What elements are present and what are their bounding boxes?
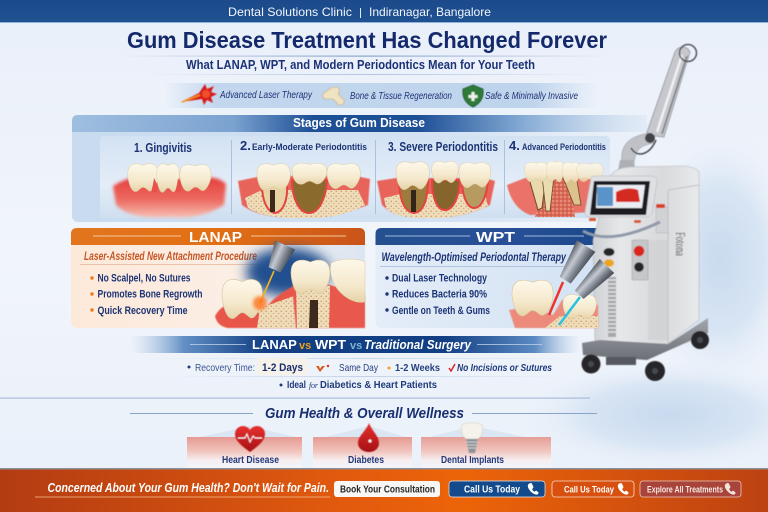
label: regeneration: Bone & Tissue Regeneration xyxy=(350,90,452,102)
machine brand: Fotona xyxy=(672,232,687,256)
button: explore treatments xyxy=(640,481,741,497)
WPT bullets: Dual Laser Technology xyxy=(392,272,488,284)
icon: laser burst xyxy=(181,84,217,105)
top clinic bar: Indiranagar, Bangalore xyxy=(369,5,491,19)
stage 2: early-moderate periodontitis: Early-Moderate Periodontitis xyxy=(252,142,367,153)
comparison row: ideal for: Diabetics & Heart Patients xyxy=(320,379,437,391)
stages heading band xyxy=(72,115,647,132)
stages heading band: Stages of Gum Disease xyxy=(293,116,425,130)
comparison row: recovery: Recovery Time: xyxy=(195,362,255,374)
footer message: Concerned About Your Gum Health? Don't Wait for Pain. xyxy=(48,481,329,495)
benefit strip xyxy=(165,83,597,108)
LANAP bullets xyxy=(90,272,203,317)
LANAP subtitle: Laser-Assisted New Attachment Procedure xyxy=(84,251,257,263)
WPT laser illustration xyxy=(509,240,614,328)
comparison heading band: Traditional Surgery xyxy=(364,337,472,352)
card: heart disease xyxy=(187,426,302,468)
WPT bullets: Gentle on Teeth & Gums xyxy=(392,305,490,317)
subtitle: What LANAP, WPT, and Modern Periodontics Mean for Your Teeth xyxy=(186,58,535,72)
LANAP heading: LANAP xyxy=(189,229,242,246)
panel: WPT xyxy=(376,228,598,328)
stage 4: advanced periodontitis: 4. xyxy=(509,138,520,153)
stage 4: advanced periodontitis xyxy=(507,138,606,217)
stage 1: gingivitis xyxy=(113,140,226,218)
button: call us blue: Call Us Today xyxy=(464,484,520,496)
LANAP bullets: No Scalpel, No Sutures xyxy=(98,272,190,284)
comparison row: recovery: Same Day xyxy=(339,362,379,374)
icon: implant xyxy=(461,423,483,453)
icon: shield xyxy=(463,85,483,107)
comparison row: ideal for: Ideal xyxy=(287,379,306,391)
icon: blood drop xyxy=(358,423,379,452)
machine base and wheels xyxy=(582,318,709,381)
LANAP bullets: Promotes Bone Regrowth xyxy=(98,288,203,300)
label: minimally invasive: Safe & Minimally Invasive xyxy=(485,90,578,102)
machine body xyxy=(582,166,709,381)
comparison row: recovery xyxy=(188,358,552,375)
stage 2: early-moderate periodontitis: 2. xyxy=(240,138,251,153)
card: heart disease: Heart Disease xyxy=(222,455,279,466)
panel: gum health and wellness xyxy=(130,406,597,468)
label: laser therapy: Advanced Laser Therapy xyxy=(219,89,313,101)
button: call us orange xyxy=(552,481,634,497)
machine touchscreen xyxy=(585,176,657,217)
button: book consultation xyxy=(334,481,440,497)
machine controls xyxy=(583,204,668,337)
top clinic bar: Dental Solutions Clinic xyxy=(228,5,352,19)
panel: LANAP xyxy=(71,228,365,328)
stage 1: gingivitis: 1. Gingivitis xyxy=(134,140,192,155)
LANAP laser illustration xyxy=(215,241,365,328)
stage 2: early-moderate periodontitis xyxy=(238,138,370,218)
panel: stages of gum disease xyxy=(72,115,647,222)
comparison row: ideal for: for xyxy=(309,381,319,390)
call to action footer xyxy=(0,468,768,512)
stage 4: advanced periodontitis: Advanced Periodontitis xyxy=(522,142,606,152)
comparison row: recovery: 1-2 Days xyxy=(262,362,303,374)
top clinic bar xyxy=(0,0,768,23)
WPT bullets: Reduces Bacteria 90% xyxy=(392,288,487,300)
machine arm xyxy=(617,44,696,176)
comparison row: recovery: No Incisions or Sutures xyxy=(457,362,552,374)
WPT heading xyxy=(376,228,598,246)
comparison heading band xyxy=(130,336,580,353)
card: diabetes: Diabetes xyxy=(348,455,384,466)
wellness heading: Gum Health & Overall Wellness xyxy=(265,406,464,422)
comparison heading band: vs xyxy=(299,340,311,352)
comparison row: ideal for xyxy=(280,379,437,391)
button: call us blue xyxy=(449,481,545,497)
comparison heading band: vs xyxy=(350,340,362,352)
LANAP bullets: Quick Recovery Time xyxy=(98,305,188,317)
comparison heading band: LANAP xyxy=(252,337,297,352)
card: dental implants: Dental Implants xyxy=(441,455,504,466)
WPT heading: WPT xyxy=(476,229,515,246)
button: call us orange: Call Us Today xyxy=(564,484,615,496)
panel: comparison xyxy=(130,336,580,391)
card: diabetes xyxy=(313,423,412,468)
WPT subtitle: Wavelength-Optimised Periodontal Therapy xyxy=(382,252,566,264)
button: book consultation: Book Your Consultation xyxy=(340,484,435,496)
stage 3: severe periodontitis xyxy=(377,139,498,218)
title: Gum Disease Treatment Has Changed Forever xyxy=(127,27,607,53)
button: explore treatments: Explore All Treatments xyxy=(647,484,723,494)
stage 3: severe periodontitis: 3. Severe Periodontitis xyxy=(388,139,498,154)
icon: heart xyxy=(235,426,265,452)
comparison row: recovery: 1-2 Weeks xyxy=(395,362,440,374)
laser machine xyxy=(582,44,709,381)
icon: bone xyxy=(323,87,344,105)
card: dental implants xyxy=(421,423,551,468)
WPT bullets xyxy=(385,272,490,317)
comparison heading band: WPT xyxy=(315,337,346,352)
LANAP heading xyxy=(71,228,365,246)
